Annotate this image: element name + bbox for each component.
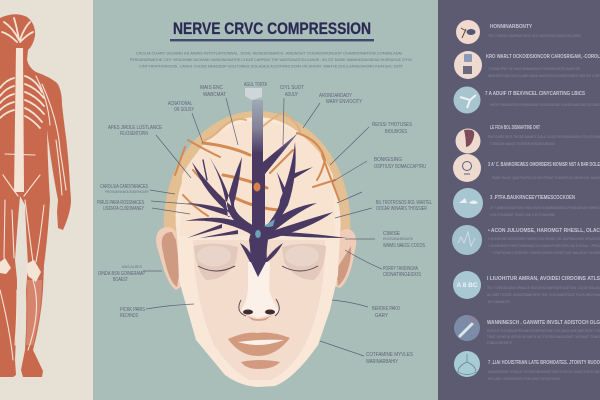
icon: badge [453, 271, 481, 299]
label: right 9: WARINARBAHIY [366, 359, 399, 365]
label: right 3 [372, 122, 413, 135]
label: left 6: MAS ALRES [122, 264, 142, 269]
intro text block: CINTYROPHONOOIS. CAVES CHOSE BEADDDP SOUTONES DOLAGES ACIOTRAS DOIN ON SIOOR. WAHYE DOCLANGESHORD FEATSAC DOIT [139, 64, 404, 68]
sidebar item 9: CINDOISHOFE [487, 340, 512, 345]
label: left 3: FILIOSENTOPIN [120, 131, 148, 137]
label: left 4 [100, 184, 149, 194]
sidebar item 1 [456, 20, 581, 44]
icon: stethoscope [454, 351, 480, 377]
label: upper left 2: ACNATIONAL [168, 101, 192, 107]
icon: badge: A 8 BC [456, 282, 478, 289]
label: upper right 1 [280, 85, 304, 98]
label: right 8: GARY [375, 313, 389, 319]
right ear [331, 229, 356, 288]
label: right 3: BIOLBIOES [385, 129, 408, 135]
panel: central diagram background [93, 0, 438, 400]
sidebar item 4 [456, 125, 600, 154]
label: upper left 2: OR SOLISY [174, 107, 194, 113]
label: right 5: OOCAR WINARIS THOSSIER [376, 206, 427, 212]
label: left 6 [98, 264, 146, 283]
label: right 6 [383, 231, 425, 249]
sidebar item 1: HONNINARBONTY [490, 24, 532, 30]
eye right [282, 244, 326, 280]
label: right 6: CIWISE [383, 231, 401, 237]
label: right 4: BONKESING [374, 157, 402, 163]
body figure with nerves [0, 14, 71, 377]
central nerve tree [185, 88, 347, 277]
label: right 8 [372, 306, 400, 319]
sidebar item 9 [454, 315, 600, 345]
label: right 5: BIL TROTROSOS ROL WARTEL [376, 200, 432, 206]
icon: wings [453, 188, 483, 218]
label: upper left 1: WABCMAT [203, 92, 226, 98]
icon: bone [454, 86, 480, 114]
panel: body illustration background [0, 0, 93, 400]
nose [239, 262, 280, 321]
label: right 4: OSPTIUSY BOMACCAPTRU [374, 164, 426, 170]
panel: symptoms sidebar background [438, 0, 600, 400]
label: left 7: PICKK PARIS [120, 307, 146, 313]
label: left 7: RECHNOS [120, 313, 138, 319]
label: left 5 [97, 200, 144, 212]
title: NERVE CRVC COMPRESSION [173, 20, 371, 38]
label: left 5: LISIDATA CUISOMANEY [103, 206, 144, 212]
label: left 3: APES JMOLE LUSTLANCE [108, 125, 163, 131]
sidebar item 6 [453, 188, 600, 218]
icon: organ [456, 128, 480, 154]
intro text block: PERDANDRMATHE CIOY VIRUGHNIE INCHANE HAINGINGMATHE CLEAR CARPING THE WASSONATION CANNE : AN OIT MOME MAIMNEIDAGHEAD HURRAGUE CHYN [130, 57, 412, 62]
label: left 5: PIRUS PARA ROSSNACES [97, 200, 144, 206]
icon: wave [452, 225, 482, 255]
label: left 6: BOAEST [113, 277, 128, 283]
lips [228, 333, 290, 356]
intro text block [130, 50, 412, 68]
sidebar item 2 [454, 51, 600, 79]
label: upper left 1: MAIS ENC [200, 85, 223, 91]
chin shadow [241, 360, 280, 369]
label: upper right 1: CIYL SUOT [280, 85, 304, 91]
icon: nerve [456, 20, 480, 44]
sidebar item 2: TLONDOPAT DE WAS BANABIDAS PONORDATES BAROSE [488, 66, 580, 71]
eye left [194, 244, 238, 280]
label: right 7 [383, 266, 422, 278]
nerve compression spots [254, 182, 275, 238]
label: upper right 2: ARONDARDADY [319, 93, 353, 99]
label: left 4: PROSNARIAMOLENDISHOARY [105, 189, 149, 194]
label: right 9: COTFAMINE MYVLES [366, 352, 414, 358]
label: right 4 [374, 157, 426, 170]
icon: wrench [454, 315, 480, 341]
label: top center: AGUL TORTA [244, 82, 267, 88]
label: upper right 2: WARY ENVIOCITY [326, 99, 363, 105]
label: upper left 2 [168, 101, 194, 113]
sidebar item 3 [454, 86, 600, 114]
label: right 7: PORRY TANDINGHA [383, 266, 418, 272]
label: upper left 1 [200, 85, 226, 98]
labels right [280, 85, 432, 365]
labels left [97, 82, 267, 319]
label: right 7: CIDNATIINGEIDOS [383, 272, 422, 278]
leader lines [143, 98, 382, 356]
sidebar item 8: IN SMANOS [488, 299, 510, 304]
sidebar item 7 [452, 225, 600, 255]
face [176, 117, 341, 387]
label: right 3: REISSI THOTUSES [372, 122, 413, 128]
label: right 9 [366, 352, 414, 365]
label: left 3 [108, 125, 163, 137]
label: left 7 [120, 307, 146, 319]
sidebar item 4: LE FIOA BOL DISMARTINE ONT [490, 125, 540, 131]
label: right 6: ENOSANAMINARE [383, 236, 413, 241]
label: upper right 2 [319, 93, 363, 105]
icon: face [453, 154, 481, 182]
sidebar item 10: HOTLANE CHRONDORAS, PION SONOT ROOLITHOUS [488, 376, 560, 381]
label: right 5 [376, 200, 432, 212]
label: left 6: OINDA BSN GOINERAMP [98, 271, 146, 277]
label: upper right 1: ADUUY [285, 92, 298, 98]
orange nerve branches [175, 112, 339, 216]
icon: bottle [454, 51, 482, 79]
label: right 8: BERDKE PAKO [372, 306, 400, 312]
head cap [164, 111, 350, 240]
sidebar item 5 [453, 154, 600, 182]
label: left 4: CAROLIUA CARISTARACES [100, 184, 148, 190]
label: right 6: WAIMS NAECE COCOS [383, 243, 425, 249]
sidebar item 4: T RANSON MANGE THOSHOR NONOHSTARIONS [490, 141, 555, 146]
sidebar item 6: 3 .PTFA.BAUKRNCEEYTIEMESCOCKOEN [490, 195, 575, 201]
left ear [156, 227, 184, 290]
intro text block: CAOLIA CUARY DESAND AS AWAIS INTOTUATIONNAL. DOHL MUSEBOSARCE. ANEWOUT DODADDRONGOP CHARMONATION CONSBLADM [136, 50, 402, 56]
sidebar item 10 [454, 351, 600, 381]
sidebar item 6: LOIS STHAWANT THADE CAN THE ROSAHONE [490, 212, 555, 217]
sidebar item 8 [453, 271, 600, 304]
